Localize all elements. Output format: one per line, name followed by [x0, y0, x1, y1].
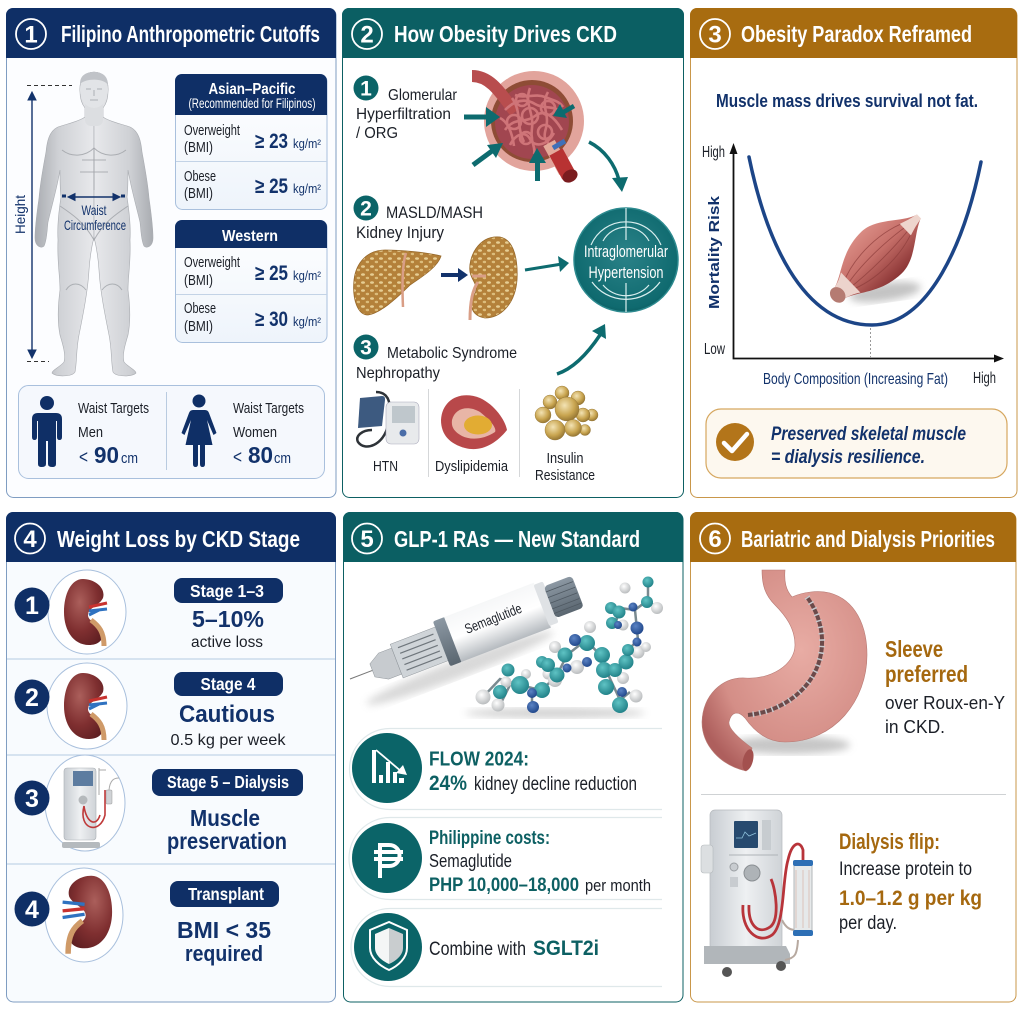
- arrow: liver to kidney: [441, 268, 468, 282]
- U-shaped mortality chart: Body Composition (Increasing Fat): [763, 371, 948, 388]
- text: dialysis flip: [839, 829, 982, 934]
- panel 3 header: 3: [708, 22, 722, 48]
- stat: FLOW 2024: 24%: [429, 772, 467, 795]
- icon: woman: [182, 394, 216, 467]
- hub: intraglomerular hypertension: Intraglomerular: [584, 243, 668, 261]
- panel 4 header: Weight Loss by CKD Stage: [57, 526, 300, 552]
- waist targets box: Women: [233, 424, 277, 441]
- table: Asian-Pacific cutoffs: (Recommended for Filipinos): [188, 96, 316, 111]
- icon: man: [32, 396, 62, 467]
- table: Western cutoffs: Western: [222, 228, 278, 245]
- row: stage 1-3: active loss: [191, 634, 263, 651]
- step 3: metabolic syndrome nephropathy: 3: [360, 336, 372, 360]
- callout: preserved skeletal muscle: [706, 409, 1007, 478]
- step 2: MASLD/MASH kidney injury: Kidney Injury: [356, 223, 444, 242]
- panel 4: weight loss by CKD stage: [6, 512, 336, 1002]
- icon: transplant kidney: [63, 876, 112, 954]
- table: Western cutoffs: (BMI): [184, 318, 213, 335]
- icon: blood pressure monitor: [357, 392, 419, 447]
- row: transplant: [14, 868, 279, 966]
- body figure with measurements: Waist: [82, 202, 107, 218]
- waist targets box: <: [233, 447, 242, 467]
- waist targets box: Waist Targets: [78, 400, 149, 417]
- stat: Philippine costs: Philippine costs:: [429, 828, 550, 849]
- stat: Philippine costs: [349, 818, 662, 900]
- table: Asian-Pacific cutoffs: (BMI): [184, 139, 213, 156]
- table: Asian-Pacific cutoffs: kg/m²: [293, 181, 322, 196]
- stat: FLOW 2024: [350, 728, 662, 810]
- row: stage 4: Stage 4: [200, 674, 256, 694]
- row: transplant: Transplant: [188, 884, 264, 904]
- row: stage 4: 2: [25, 684, 39, 712]
- curved arrow to hub from step 1: [589, 142, 628, 192]
- illustration: sleeve stomach: [702, 570, 867, 772]
- panel 2 header: How Obesity Drives CKD: [394, 21, 617, 47]
- stat: combine with SGLT2i: Combine with: [429, 939, 526, 960]
- key message: Muscle mass drives survival not fat.: [716, 91, 978, 111]
- label: HTN: HTN: [373, 458, 398, 475]
- table: Western cutoffs: Obese: [184, 300, 216, 317]
- row: stage 5 dialysis: Stage 5 – Dialysis: [167, 772, 289, 792]
- waist targets box: cm: [121, 450, 138, 467]
- waist targets box: 80: [248, 442, 273, 468]
- panel 6 header: [690, 512, 1016, 562]
- illustration: glomerulus: [472, 71, 584, 185]
- panel 2 header: [342, 8, 684, 58]
- illustration: dialysis machine: [701, 810, 813, 977]
- row: stage 4: 0.5 kg per week: [170, 732, 287, 749]
- curved arrow to hub from step 3: [557, 324, 606, 374]
- step 3: metabolic syndrome nephropathy: [354, 334, 517, 382]
- panel 6 header: 6: [708, 526, 722, 553]
- row: stage 1-3: 5–10%: [192, 606, 264, 632]
- waist targets box: [18, 386, 324, 478]
- arrows toward glomerulus: [464, 104, 574, 181]
- panel 4 header: 4: [23, 526, 37, 553]
- illustration: semaglutide pen: Semaglutide: [462, 600, 524, 637]
- step 1: glomerular hyperfiltration: Glomerular: [388, 87, 458, 104]
- table: Asian-Pacific cutoffs: ≥ 25: [255, 175, 288, 198]
- row: stage 5 dialysis: Muscle: [190, 805, 260, 831]
- panel 5 header: [343, 512, 683, 562]
- waist targets box: cm: [274, 450, 291, 467]
- label: insulin resistance: Resistance: [535, 467, 595, 484]
- panel 1 header: Filipino Anthropometric Cutoffs: [61, 21, 320, 47]
- table: Western cutoffs: [175, 220, 327, 342]
- panel 2 header: 2: [360, 22, 374, 48]
- panel 3 header: [690, 8, 1017, 58]
- U-shaped mortality chart: High: [702, 144, 725, 161]
- row: stage 4: Cautious: [179, 701, 275, 728]
- illustration: muscle: [813, 196, 939, 321]
- step 2: MASLD/MASH kidney injury: MASLD/MASH: [386, 203, 483, 222]
- icon: declining bar chart: [352, 733, 422, 803]
- row: stage 1-3: 1: [25, 592, 39, 620]
- table: Asian-Pacific cutoffs: kg/m²: [293, 136, 322, 151]
- row: transplant: BMI < 35: [177, 917, 271, 943]
- hub: intraglomerular hypertension: [574, 208, 678, 312]
- icon: check mark: [716, 423, 754, 461]
- step 1: glomerular hyperfiltration: Hyperfiltration: [356, 106, 451, 123]
- callout: preserved skeletal muscle: Preserved skeletal muscle: [771, 424, 966, 445]
- stat: FLOW 2024: kidney decline reduction: [474, 774, 637, 795]
- step 3: metabolic syndrome nephropathy: Metabolic Syndrome: [387, 345, 517, 362]
- label: insulin resistance: Insulin: [546, 450, 584, 467]
- table: Western cutoffs: ≥ 30: [255, 308, 288, 331]
- callout: preserved skeletal muscle: = dialysis resilience.: [771, 447, 925, 468]
- waist targets box: <: [79, 447, 88, 467]
- icon: kidney: [64, 673, 107, 740]
- icon: artery plaque: [441, 395, 507, 449]
- text: sleeve preferred: preferred: [885, 661, 968, 687]
- panel 5 header: 5: [360, 526, 374, 553]
- U-shaped mortality chart: [702, 143, 1004, 388]
- row: transplant: required: [185, 941, 263, 966]
- text: sleeve preferred: in CKD.: [885, 716, 945, 737]
- hub: intraglomerular hypertension: Hypertension: [588, 264, 664, 282]
- step 1: glomerular hyperfiltration: [354, 76, 458, 142]
- stat: Philippine costs: Semaglutide: [429, 851, 512, 871]
- panel 2: how obesity drives CKD: [342, 8, 684, 498]
- table: Asian-Pacific cutoffs: [175, 74, 327, 210]
- table: Western cutoffs: Overweight: [184, 254, 241, 271]
- table: Asian-Pacific cutoffs: Obese: [184, 168, 216, 185]
- row: stage 5 dialysis: preservation: [167, 828, 287, 854]
- waist targets box: 90: [94, 442, 119, 468]
- stat: Philippine costs: per month: [585, 876, 651, 895]
- text: dialysis flip: Increase protein to: [839, 859, 972, 880]
- table: Western cutoffs: (BMI): [184, 272, 213, 289]
- table: Asian-Pacific cutoffs: Asian–Pacific: [208, 81, 296, 98]
- text: dialysis flip: 1.0–1.2 g per kg: [839, 887, 982, 910]
- icon: shield: [354, 913, 422, 981]
- illustration: fatty kidney: [470, 237, 517, 320]
- row: stage 5 dialysis: [14, 755, 303, 854]
- table: Asian-Pacific cutoffs: (BMI): [184, 185, 213, 202]
- row: stage 4: [14, 663, 287, 749]
- row: stage 1-3: [14, 570, 283, 654]
- U-shaped mortality chart: Low: [704, 341, 725, 358]
- stat: combine with SGLT2i: [351, 908, 662, 986]
- waist targets box: Men: [78, 424, 103, 441]
- body figure with measurements: Circumference: [64, 217, 126, 233]
- text: dialysis flip: per day.: [839, 913, 897, 934]
- panel 5 header: GLP-1 RAs — New Standard: [394, 526, 640, 552]
- text: dialysis flip: Dialysis flip:: [839, 829, 940, 854]
- icon: fat cells: [535, 386, 598, 440]
- icon: small dialysis machine: [62, 768, 119, 848]
- icon: kidney: [64, 579, 107, 646]
- panel 6: bariatric and dialysis priorities: [690, 512, 1016, 1002]
- label: insulin resistance: [535, 450, 595, 484]
- stat: Philippine costs: PHP 10,000–18,000: [429, 874, 579, 896]
- step 1: glomerular hyperfiltration: 1: [360, 78, 372, 100]
- step 1: glomerular hyperfiltration: / ORG: [356, 125, 398, 142]
- body figure with measurements: [12, 72, 153, 376]
- table: Asian-Pacific cutoffs: Overweight: [184, 122, 241, 139]
- text: sleeve preferred: [885, 636, 1005, 737]
- waist targets box: Waist Targets: [233, 400, 304, 417]
- panel 3: obesity paradox reframed: [690, 8, 1017, 498]
- table: Western cutoffs: kg/m²: [293, 268, 322, 283]
- label: dyslipidemia: Dyslipidemia: [435, 458, 509, 475]
- table: Western cutoffs: ≥ 25: [255, 262, 288, 285]
- panel 1 header: 1: [24, 22, 38, 48]
- body figure with measurements: Height: [12, 195, 28, 234]
- table: Asian-Pacific cutoffs: ≥ 23: [255, 130, 288, 153]
- illustration: molecule: [465, 576, 663, 718]
- step 3: metabolic syndrome nephropathy: Nephropathy: [356, 365, 440, 382]
- U-shaped mortality chart: High: [973, 370, 996, 387]
- step 2: MASLD/MASH kidney injury: 2: [360, 198, 372, 220]
- text: sleeve preferred: over Roux-en-Y: [885, 692, 1005, 713]
- text: sleeve preferred: Sleeve: [885, 636, 943, 662]
- row: stage 5 dialysis: 3: [25, 785, 39, 813]
- icon: peso sign: [352, 823, 422, 893]
- illustration: semaglutide pen: [341, 569, 586, 712]
- table: Western cutoffs: kg/m²: [293, 314, 322, 329]
- U-shaped mortality chart: Mortality Risk: [706, 195, 723, 309]
- arrow: kidney to hub: [525, 256, 569, 272]
- row: transplant: 4: [25, 896, 39, 924]
- panel 5: GLP-1 RAs new standard: [341, 512, 683, 1002]
- panel 1 header: [6, 8, 336, 58]
- row: stage 1-3: Stage 1–3: [190, 581, 264, 601]
- stat: FLOW 2024: FLOW 2024:: [429, 748, 529, 770]
- stat: combine with SGLT2i: SGLT2i: [533, 937, 599, 960]
- step 2: MASLD/MASH kidney injury: [354, 196, 483, 242]
- panel 4 header: [6, 512, 336, 562]
- illustration: fatty liver: [354, 250, 441, 315]
- panel 1: Filipino anthropometric cutoffs: [6, 8, 336, 498]
